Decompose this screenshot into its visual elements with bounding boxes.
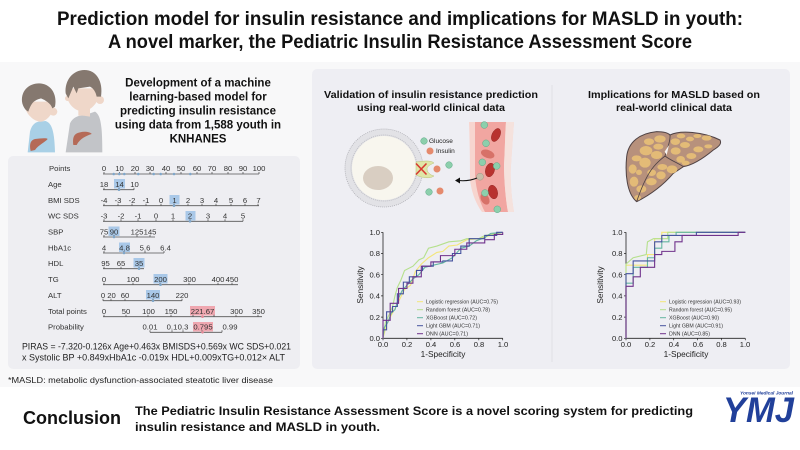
row: HDL: 35: [135, 259, 143, 268]
row: Age: 10: [130, 180, 139, 189]
row: BMI SDS: 4: [214, 196, 219, 205]
chart: validation ROC curves: 0.8: [369, 249, 380, 258]
row: Probability: 0.99: [223, 322, 237, 332]
formula: x Systolic BP +0.849xHbA1c -0.019x HDL+0.009xTG+0.012× ALT: [22, 352, 285, 362]
row: BMI SDS: -2: [129, 196, 135, 205]
row: Total points: 0: [102, 307, 106, 316]
row: Points: 10: [115, 164, 124, 173]
row: TG: 400: [212, 275, 224, 284]
chart: validation ROC curves: XGBoost (AUC=0.72): [426, 316, 477, 322]
row: TG: 300: [183, 275, 196, 284]
row: Points: 100: [253, 164, 265, 173]
formula: PIRAS = -7.320-0.126x Age+0.463x BMISDS+0.569x WC SDS+0.021: [22, 342, 291, 352]
row: WC SDS: WC SDS: [48, 212, 79, 220]
row: SBP: 90: [110, 228, 118, 236]
chart: validation ROC curves: Sensitivity: [355, 265, 365, 304]
row: Points: [49, 164, 265, 175]
chart: validation ROC curves: 1.0: [498, 340, 508, 349]
row: Age: 14: [115, 180, 124, 189]
row: SBP: 145: [144, 228, 156, 236]
row: WC SDS: -1: [135, 212, 141, 220]
illustration: fatty liver: [626, 132, 721, 202]
row: Points: 70: [208, 164, 216, 173]
logo: YMJ: YMJ: [723, 391, 796, 430]
chart: validation ROC curves: 1-Specificity: [421, 349, 466, 359]
chart: implications ROC curves: [595, 228, 750, 359]
row: HDL: HDL: [48, 259, 64, 268]
row: Points: 80: [224, 164, 232, 173]
heading: implications: Implications for MASLD based on: [588, 90, 760, 101]
chart: validation ROC curves: 0.0: [378, 340, 388, 349]
chart: validation ROC curves: 0.6: [369, 270, 380, 280]
chart: implications ROC curves: Logistic regression (AUC=0.93): [669, 300, 741, 306]
row: Points: 0: [102, 164, 106, 173]
row: Probability: 0.795: [193, 322, 213, 332]
row: Points: 20: [131, 164, 139, 173]
row: HbA1c: HbA1c: [48, 244, 71, 252]
row: BMI SDS: -1: [143, 196, 149, 205]
row: Total points: 350: [252, 307, 265, 316]
row: BMI SDS: 5: [229, 196, 233, 205]
row: TG: 450: [226, 275, 238, 284]
row: BMI SDS: 0: [159, 196, 163, 205]
panel: validation and implications: [312, 69, 790, 369]
chart: implications ROC curves: 0.6: [693, 340, 703, 349]
heading: validation: Validation of insulin resistance prediction: [324, 90, 538, 101]
row: HDL: 95: [101, 259, 110, 268]
row: WC SDS: 2: [188, 212, 192, 220]
row: Total points: 221.67: [191, 307, 214, 316]
chart: validation ROC curves: 0.4: [426, 340, 436, 349]
row: SBP: SBP: [48, 228, 63, 236]
row: Total points: 300: [230, 307, 243, 316]
heading: development: Development of a machine: [125, 78, 271, 90]
chart: implications ROC curves: 0.4: [612, 292, 622, 300]
row: Probability: 0.01: [143, 322, 157, 332]
chart: implications ROC curves: 0.8: [716, 340, 727, 349]
row: Age: 18: [100, 180, 108, 189]
heading: validation: using real-world clinical data: [357, 103, 505, 114]
row: BMI SDS: 7: [256, 196, 261, 205]
row: TG: 0: [102, 275, 106, 284]
row: TG: TG: [48, 275, 59, 284]
row: HbA1c: [48, 242, 172, 254]
row: SBP: 75: [100, 228, 108, 236]
row: HbA1c: 4: [102, 244, 107, 252]
row: Points: 50: [177, 164, 185, 173]
formula: [22, 342, 291, 362]
illustration: insulin resistance: Insulin: [436, 148, 455, 155]
row: WC SDS: -3: [101, 212, 107, 220]
title: A novel marker, the Pediatric Insulin Resistance Assessment Score: [108, 31, 692, 53]
row: Age: Age: [48, 180, 62, 189]
row: TG: 100: [127, 275, 139, 284]
chart: validation ROC curves: [355, 228, 508, 359]
conclusion text: insulin resistance and MASLD in youth.: [135, 420, 380, 434]
chart: implications ROC curves: 0.0: [612, 334, 622, 343]
row: BMI SDS: -3: [115, 196, 121, 205]
row: ALT: ALT: [48, 291, 62, 300]
chart: validation ROC curves: 0.6: [450, 340, 460, 349]
row: HbA1c: 6.4: [160, 244, 172, 252]
chart: implications ROC curves: 1-Specificity: [664, 349, 709, 359]
row: BMI SDS: -4: [101, 196, 108, 205]
row: Total points: [48, 306, 265, 318]
row: Total points: Total points: [48, 307, 87, 316]
row: Probability: 0.3: [178, 322, 188, 332]
title: [57, 8, 743, 53]
row: ALT: 60: [121, 291, 129, 300]
chart: validation ROC curves: DNN (AUC=0.71): [426, 332, 468, 338]
panel: nomogram: [8, 156, 300, 369]
heading: implications: [588, 90, 760, 114]
heading: development: [115, 78, 281, 146]
row: ALT: 140: [147, 291, 159, 300]
row: Probability: [48, 322, 237, 334]
row: Age: [48, 179, 139, 191]
row: WC SDS: [48, 211, 245, 223]
conclusion text: The Pediatric Insulin Resistance Assessment Score is a novel scoring system for predicting: [135, 404, 693, 418]
heading: development: KNHANES: [170, 134, 227, 146]
heading: development: learning-based model for: [129, 92, 267, 104]
row: BMI SDS: 2: [186, 196, 190, 205]
row: BMI SDS: 6: [243, 196, 247, 205]
row: WC SDS: 1: [171, 212, 175, 220]
heading: development: predicting insulin resistance: [120, 106, 276, 118]
row: Total points: 150: [165, 307, 177, 316]
chart: implications ROC curves: 0.2: [645, 340, 655, 349]
chart: validation ROC curves: 0.0: [369, 334, 380, 343]
row: HDL: 65: [117, 259, 125, 268]
row: WC SDS: -2: [118, 212, 124, 220]
chart: validation ROC curves: Logistic regression (AUC=0.75): [426, 300, 498, 306]
row: Total points: 50: [122, 307, 130, 316]
chart: validation ROC curves: Light GBM (AUC=0.71): [426, 324, 480, 330]
chart: validation ROC curves: 1.0: [369, 228, 380, 237]
row: Probability: 0.1: [167, 322, 177, 332]
chart: implications ROC curves: Light GBM (AUC=0.91): [669, 324, 723, 330]
row: Points: 40: [162, 164, 170, 173]
row: WC SDS: 0: [154, 212, 158, 220]
chart: implications ROC curves: Sensitivity: [595, 265, 605, 304]
heading: validation: [324, 90, 538, 114]
chart: implications ROC curves: 1.0: [740, 340, 750, 349]
row: BMI SDS: [48, 195, 261, 207]
chart: implications ROC curves: 0.2: [612, 313, 622, 322]
chart: validation ROC curves: 0.8: [474, 340, 484, 349]
chart: implications ROC curves: 0.4: [669, 340, 679, 349]
row: HDL: [48, 258, 144, 270]
conclusion text: [135, 404, 693, 434]
row: Points: 30: [146, 164, 154, 173]
chart: implications ROC curves: 0.6: [612, 270, 622, 280]
row: Total points: 100: [142, 307, 155, 316]
row: BMI SDS: 1: [172, 196, 177, 205]
illustration: insulin resistance: Glucose: [429, 138, 453, 145]
row: ALT: 0: [101, 291, 105, 300]
row: Probability: Probability: [48, 322, 84, 332]
row: Points: Points: [49, 164, 71, 173]
logo: YMJ: Yonsei Medical Journal: [740, 390, 794, 396]
chart: implications ROC curves: Random forest (AUC=0.95): [669, 308, 732, 314]
row: HbA1c: 5.6: [140, 244, 150, 252]
heading: development: using data from 1,588 youth in: [115, 120, 281, 132]
chart: validation ROC curves: 0.2: [402, 340, 412, 349]
row: WC SDS: 5: [241, 212, 245, 220]
chart: implications ROC curves: 0.0: [621, 340, 631, 349]
chart: implications ROC curves: 0.8: [612, 249, 622, 258]
row: TG: 200: [154, 275, 167, 284]
chart: implications ROC curves: DNN (AUC=0.85): [669, 332, 710, 338]
row: SBP: 125: [131, 228, 143, 236]
row: Points: 90: [239, 164, 247, 173]
conclusion label: Conclusion: [23, 408, 121, 428]
row: TG: [48, 274, 238, 286]
title: Prediction model for insulin resistance and implications for MASLD in youth:: [57, 8, 743, 30]
row: HbA1c: 4.8: [119, 244, 130, 252]
row: BMI SDS: BMI SDS: [48, 196, 80, 205]
row: ALT: 220: [176, 291, 188, 300]
row: SBP: [48, 226, 156, 238]
row: WC SDS: 4: [223, 212, 228, 220]
row: ALT: 20: [107, 291, 116, 300]
row: Points: 60: [193, 164, 201, 173]
chart: implications ROC curves: XGBoost (AUC=0.90): [669, 316, 719, 322]
row: BMI SDS: 3: [200, 196, 204, 205]
chart: validation ROC curves: 0.4: [369, 292, 380, 300]
footnote: *MASLD: metabolic dysfunction-associated steatotic liver disease: [8, 375, 273, 385]
icon: two children with livers: [22, 70, 104, 152]
row: ALT: [48, 290, 188, 302]
heading: implications: real-world clinical data: [616, 103, 732, 114]
row: WC SDS: 3: [206, 212, 210, 220]
chart: implications ROC curves: 1.0: [612, 228, 622, 237]
illustration: insulin resistance: [345, 122, 514, 213]
chart: validation ROC curves: Random forest (AUC=0.78): [426, 308, 490, 314]
chart: validation ROC curves: 0.2: [369, 313, 380, 322]
